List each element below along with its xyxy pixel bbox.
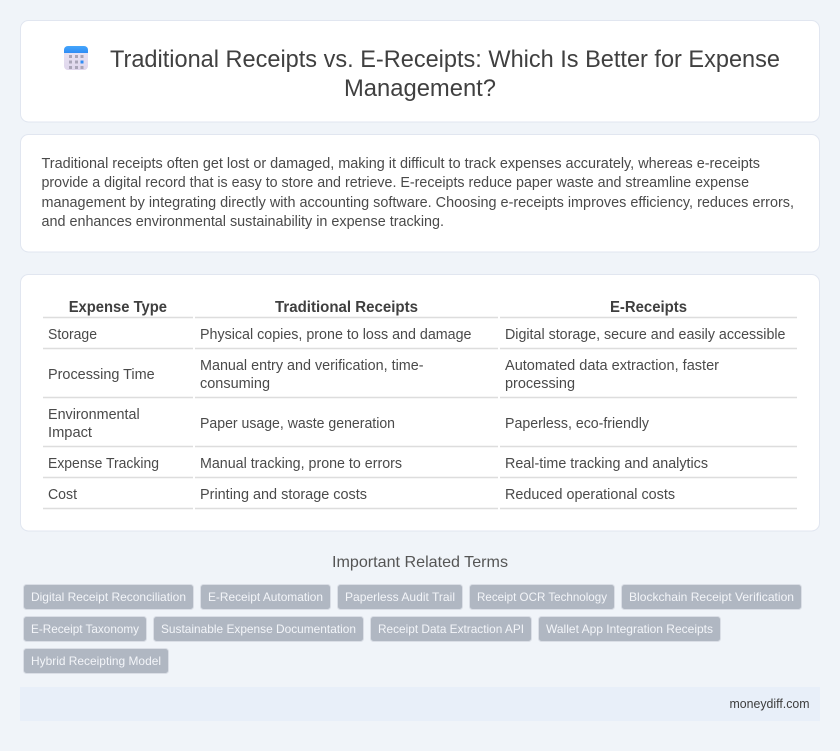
row: expense tracking: Real-time tracking and analytics — [505, 456, 708, 472]
tag — [538, 616, 720, 642]
text block: summary: and enhances environmental sustainability in expense tracking. — [42, 214, 444, 230]
footer — [20, 687, 820, 721]
tag — [24, 584, 194, 610]
row: storage — [43, 327, 797, 348]
tag — [24, 648, 168, 674]
row: processing time — [43, 358, 797, 398]
row: cost: Printing and storage costs — [200, 487, 367, 503]
panel: summary paragraph — [20, 134, 820, 252]
row: expense tracking — [43, 456, 797, 478]
text block: summary: management by integrating directly with accounting software. Choosing e-receipts improves efficiency, reduces errors, — [42, 195, 794, 211]
text block: summary — [42, 156, 794, 230]
tag — [622, 584, 802, 610]
row: environmental impact: Impact — [48, 425, 92, 441]
row: processing time: Automated data extraction, faster — [505, 358, 719, 374]
tag: E-Receipt Taxonomy — [31, 622, 139, 636]
panel: header — [20, 20, 820, 122]
tag: Digital Receipt Reconciliation — [31, 590, 186, 604]
row: processing time: Manual entry and verification, time- — [200, 358, 424, 374]
row: environmental impact: Environmental — [48, 407, 140, 423]
tag: Wallet App Integration Receipts — [546, 622, 713, 636]
footer: moneydiff.com — [730, 696, 810, 711]
tag: Sustainable Expense Documentation — [161, 622, 356, 636]
row: storage: Digital storage, secure and easily accessible — [505, 327, 786, 343]
title: Traditional Receipts vs. E-Receipts: Which Is Better for Expense — [110, 46, 780, 73]
tags: related terms — [24, 584, 802, 674]
tag: Paperless Audit Trail — [345, 590, 455, 604]
tag — [370, 616, 532, 642]
row: expense tracking: Expense Tracking — [48, 456, 159, 472]
row: cost: Cost — [48, 487, 77, 503]
row: environmental impact — [43, 407, 797, 446]
tag — [338, 584, 462, 610]
row: storage: Storage — [48, 327, 97, 343]
tag: Receipt OCR Technology — [477, 590, 607, 604]
row: expense tracking: Manual tracking, prone to errors — [200, 456, 402, 472]
text block: summary: Traditional receipts often get lost or damaged, making it difficult to track expenses accurately, whereas e-receipts — [42, 156, 760, 172]
table header: Traditional Receipts — [275, 299, 418, 316]
tag — [154, 616, 364, 642]
tag: Blockchain Receipt Verification — [629, 590, 794, 604]
panel: comparison table — [20, 274, 820, 531]
row: processing time: consuming — [200, 376, 270, 392]
tag: E-Receipt Automation — [208, 590, 323, 604]
text block: summary: provide a digital record that is easy to store and retrieve. E-receipts reduce paper waste and streamline expense — [42, 175, 749, 191]
tag: Hybrid Receipting Model — [31, 654, 161, 668]
icon: calendar — [64, 46, 88, 70]
row: processing time: Processing Time — [48, 367, 155, 383]
tag — [200, 584, 330, 610]
row: cost: Reduced operational costs — [505, 487, 675, 503]
heading: important related terms: Important Related Terms — [332, 554, 508, 571]
table header: E-Receipts — [610, 299, 687, 316]
row: cost — [43, 487, 797, 508]
row: processing time: processing — [505, 376, 575, 392]
row: storage: Physical copies, prone to loss and damage — [200, 327, 472, 343]
tag: Receipt Data Extraction API — [378, 622, 524, 636]
tag — [24, 616, 146, 642]
tag — [470, 584, 614, 610]
title — [110, 46, 780, 102]
row: environmental impact: Paper usage, waste generation — [200, 416, 395, 432]
table header: Expense Type — [69, 299, 167, 316]
table header — [43, 299, 797, 318]
row: environmental impact: Paperless, eco-friendly — [505, 416, 650, 432]
title: Management? — [344, 75, 496, 102]
